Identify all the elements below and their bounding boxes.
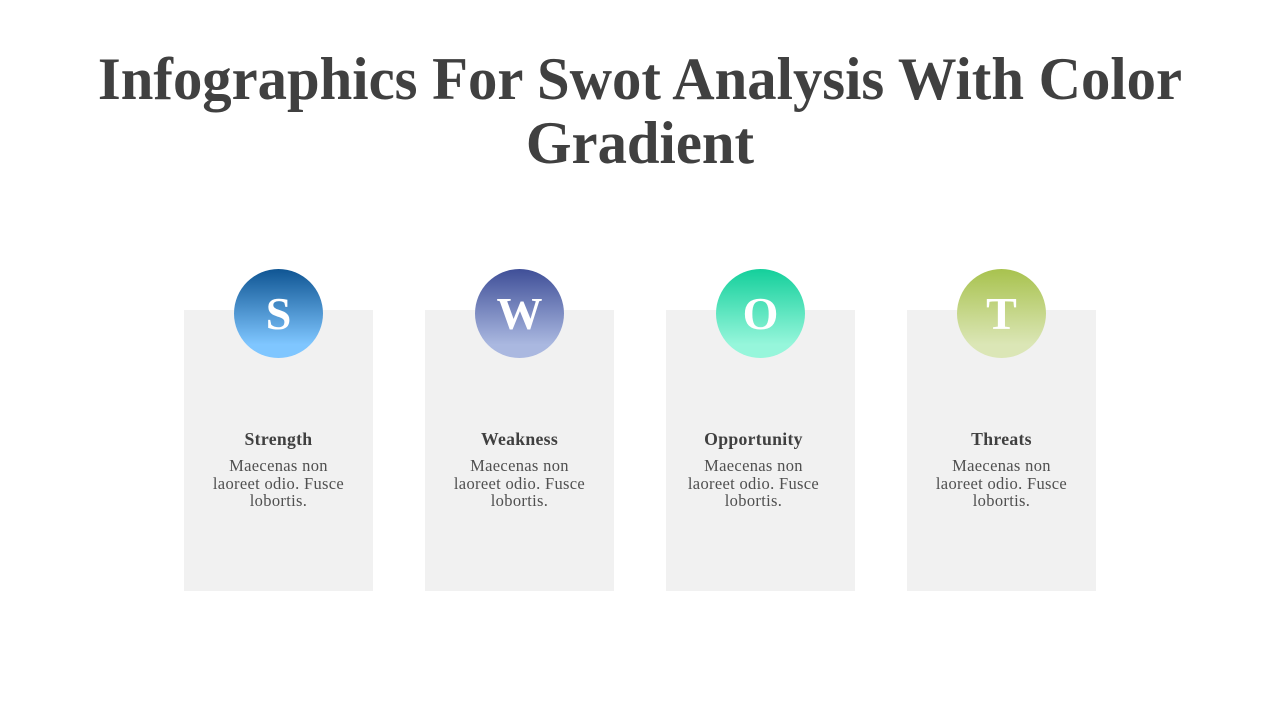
text block: threats: Maecenas non [952,456,1051,475]
card background [425,310,614,591]
text block: threats [936,456,1067,510]
text block: threats: lobortis. [973,491,1030,510]
heading: Opportunity: Opportunity [704,429,803,449]
icon: letter W circle: W [496,288,542,339]
text block: weakness [454,456,585,510]
panel: strength [184,269,373,591]
text block: opportunity: lobortis. [725,491,782,510]
text block: opportunity: laoreet odio. Fusce [688,474,819,492]
card background [184,310,373,591]
icon: letter W circle [475,269,564,358]
heading: Threats: Threats [971,429,1032,449]
panel: threats [907,269,1096,591]
icon: letter T circle [957,269,1046,358]
card background [907,310,1096,591]
heading: Weakness: Weakness [481,429,558,449]
icon: letter S circle: S [266,288,291,339]
title: Gradient [526,110,754,176]
text block: weakness: laoreet odio. Fusce [454,474,585,492]
text block: threats: laoreet odio. Fusce [936,474,1067,492]
text block: weakness: Maecenas non [470,456,569,475]
text block: strength: Maecenas non [229,456,328,475]
title [98,46,1182,176]
title: Infographics For Swot Analysis With Color [98,46,1182,112]
text block: opportunity: Maecenas non [704,456,803,475]
icon: letter S circle [234,269,323,358]
card background [666,310,855,591]
icon: letter O circle [716,269,805,358]
panel: opportunity [666,269,855,591]
heading: Strength: Strength [245,429,312,449]
text block: weakness: lobortis. [491,491,548,510]
icon: letter T circle: T [986,288,1017,339]
text block: strength: lobortis. [250,491,307,510]
text block: opportunity [688,456,819,510]
text block: strength [213,456,344,510]
panel: weakness [425,269,614,591]
icon: letter O circle: O [743,288,778,339]
text block: strength: laoreet odio. Fusce [213,474,344,492]
